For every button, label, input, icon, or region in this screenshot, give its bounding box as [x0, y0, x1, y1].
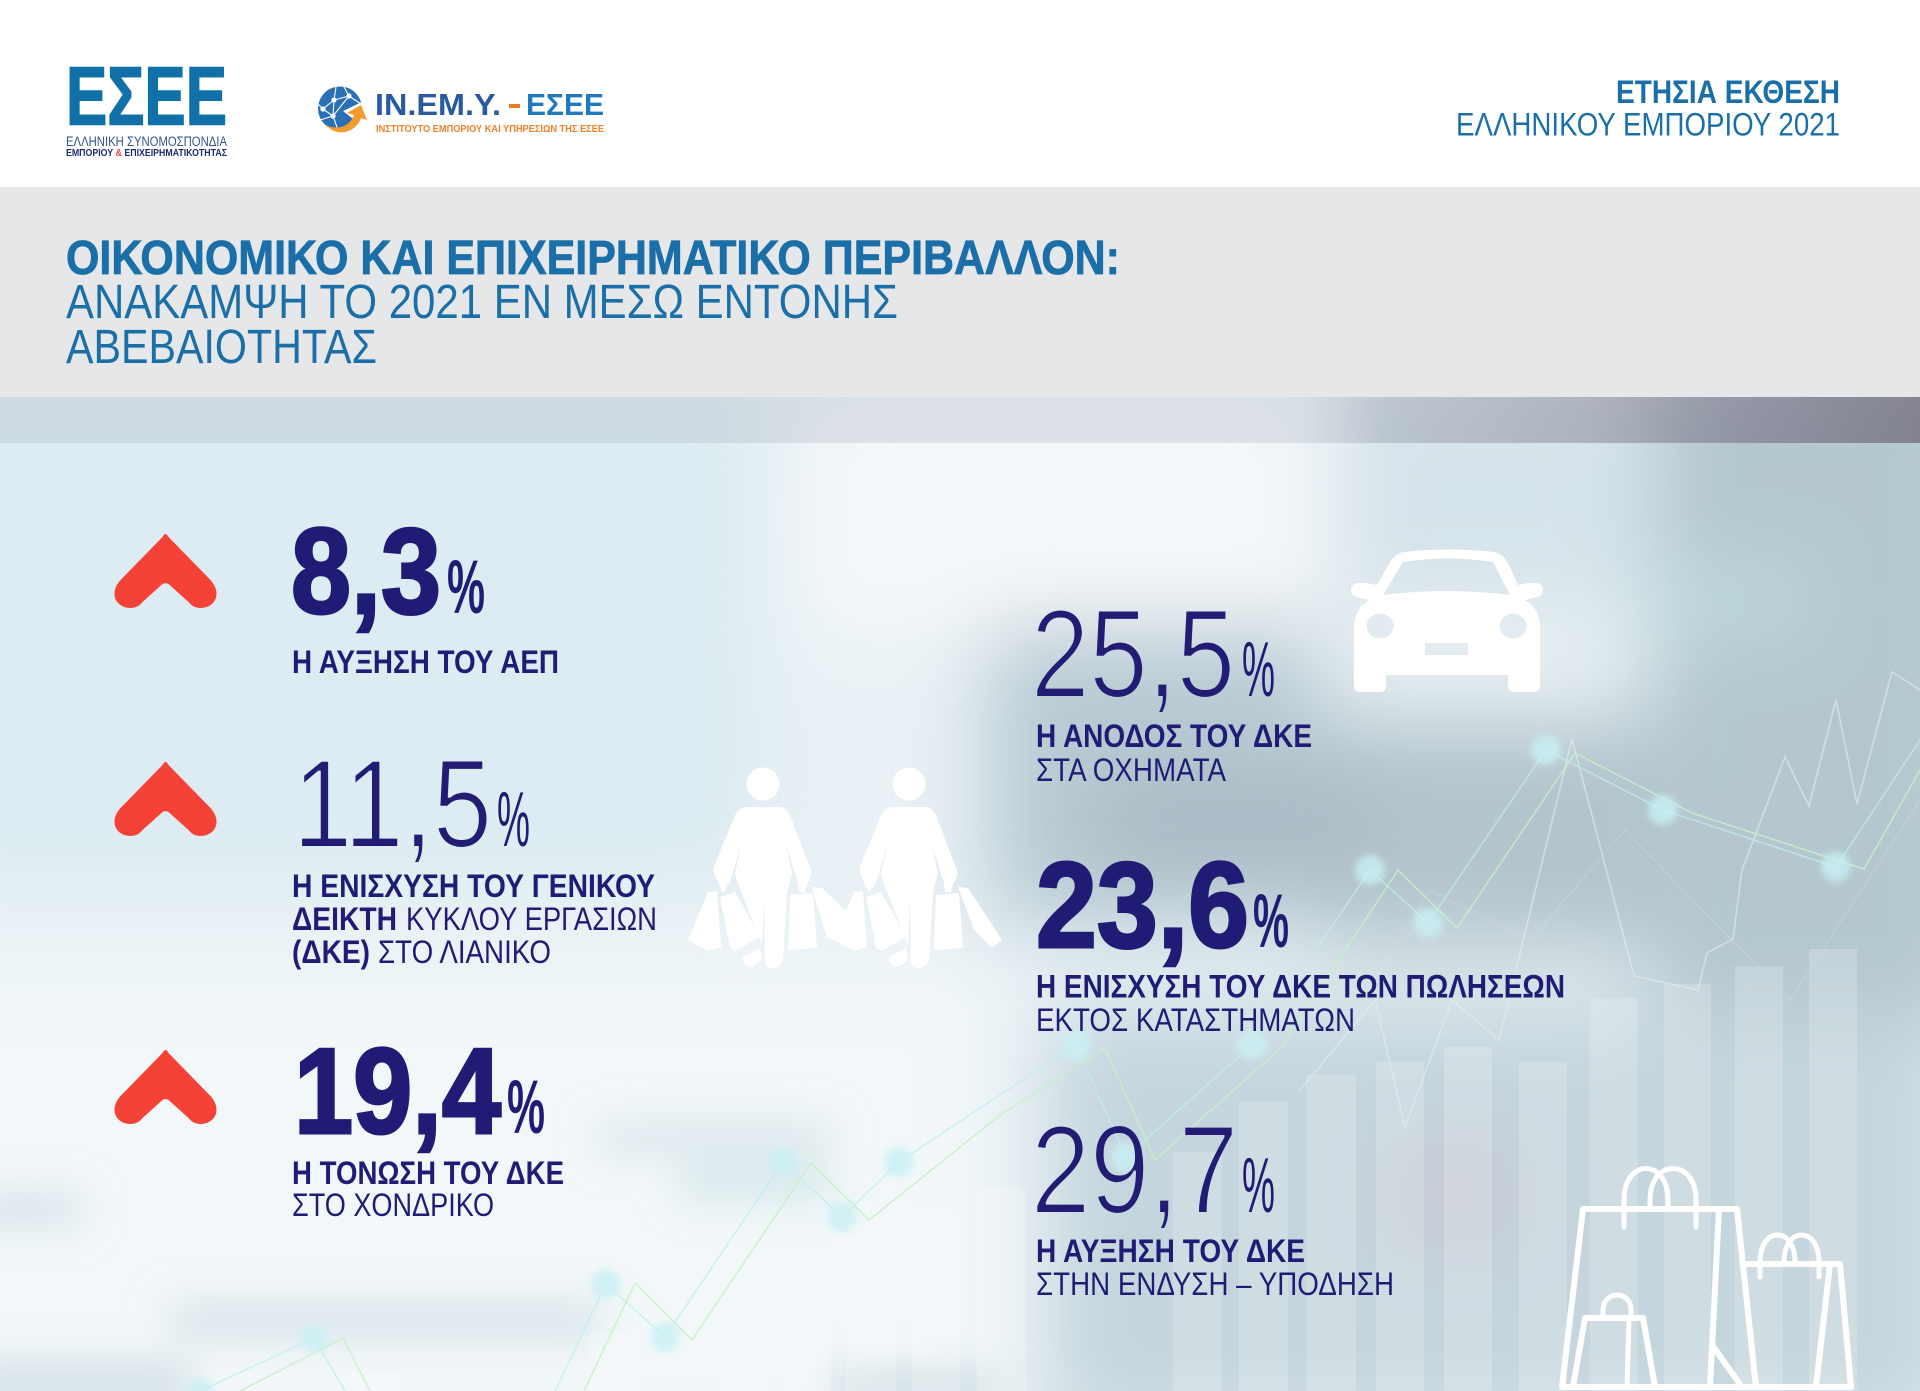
label: Η ΑΥΞΗΣΗ ΤΟΥ ΑΕΠ: [292, 644, 559, 680]
label: [292, 1155, 564, 1223]
percent sign: %: [447, 545, 485, 630]
strip under the header: [0, 397, 1920, 443]
percent sign: %: [507, 1065, 545, 1150]
label: [292, 868, 657, 970]
number: 19,4: [294, 1023, 501, 1159]
label: Η ΕΝΙΣΧΥΣΗ ΤΟΥ ΓΕΝΙΚΟΥ: [292, 868, 655, 904]
stat: 8,3% GDP: [114, 503, 559, 680]
logo: ΕΣΕΕ: ΕΜΠΟΡΙΟΥ & ΕΠΙΧΕΙΡΗΜΑΤΙΚΟΤΗΤΑΣ: [66, 147, 227, 159]
icon: car: [1351, 550, 1543, 692]
heading: ΑΝΑΚΑΜΨΗ ΤΟ 2021 ΕΝ ΜΕΣΩ ΕΝΤΟΝΗΣ: [66, 276, 898, 329]
stat: 11,5% retail: %: [497, 775, 530, 863]
icon: up arrow: [114, 534, 216, 608]
label: ΣΤΗΝ ΕΝΔΥΣΗ – ΥΠΟΔΗΣΗ: [1036, 1266, 1394, 1302]
number: 25,5: [1031, 585, 1235, 724]
logo: IN.EM.Y. - ΕΣΕΕ: [318, 86, 604, 135]
report title top right: [1456, 74, 1840, 142]
bar chart in background: [1173, 949, 1857, 1391]
logo: IN.EM.Y. - ΕΣΕΕ: ΕΣΕΕ: [526, 87, 604, 122]
stat: 11,5% retail: [114, 735, 657, 970]
large bag: [1562, 1168, 1756, 1387]
stat: 29,7% clothing and footwear: [1031, 1101, 1394, 1302]
label: ΕΚΤΟΣ ΚΑΤΑΣΤΗΜΑΤΩΝ: [1036, 1002, 1355, 1038]
stat: 29,7% clothing and footwear: %: [1242, 1141, 1275, 1229]
label: [1036, 968, 1565, 1038]
stat: 25,5% vehicles: %: [1242, 625, 1275, 713]
glowing chart nodes: [187, 735, 1851, 1391]
logo: ΕΣΕΕ: [66, 50, 227, 159]
label: Η ΕΝΙΣΧΥΣΗ ΤΟΥ ΔΚΕ ΤΩΝ ΠΩΛΗΣΕΩΝ: [1036, 968, 1565, 1004]
stat: 19,4% wholesale: [114, 1023, 564, 1223]
number: 8,3: [291, 503, 441, 639]
label: Η ΤΟΝΩΣΗ ΤΟΥ ΔΚΕ: [292, 1155, 564, 1191]
label: ΣΤΑ ΟΧΗΜΑΤΑ: [1036, 752, 1227, 788]
label: ΣΤΟ ΧΟΝΔΡΙΚΟ: [292, 1187, 494, 1223]
label: ΔΕΙΚΤΗ: [292, 901, 397, 937]
heading: ΑΒΕΒΑΙΟΤΗΤΑΣ: [66, 321, 377, 374]
label: ΚΥΚΛΟΥ ΕΡΓΑΣΙΩΝ: [406, 901, 657, 937]
heading: ΟΙΚΟΝΟΜΙΚΟ ΚΑΙ ΕΠΙΧΕΙΡΗΜΑΤΙΚΟ ΠΕΡΙΒΑΛΛΟΝ:: [66, 232, 1120, 285]
number: 11,5: [293, 735, 492, 874]
label: Η ΑΝΟΔΟΣ ΤΟΥ ΔΚΕ: [1036, 718, 1312, 754]
number: 29,7: [1031, 1101, 1238, 1240]
logo: ΕΣΕΕ: ΕΛΛΗΝΙΚΗ ΣΥΝΟΜΟΣΠΟΝΔΙΑ: [66, 134, 227, 149]
label: [1036, 718, 1312, 788]
shopper two: [834, 768, 1002, 968]
icon: shoppers with bags: [688, 768, 1002, 968]
stat: 25,5% vehicles: [1031, 585, 1312, 788]
label: Η ΑΥΞΗΣΗ ΤΟΥ ΔΚΕ: [1036, 1233, 1305, 1269]
blurred photo background: [0, 360, 1920, 1391]
logo: ΕΣΕΕ: ΕΣΕΕ: [66, 50, 227, 142]
icon: up arrow: [114, 762, 216, 836]
report title top right: ΕΛΛΗΝΙΚΟΥ ΕΜΠΟΡΙΟΥ 2021: [1456, 106, 1840, 142]
icon: shopping bags outline: [1562, 1168, 1851, 1387]
line chart in background: [200, 672, 1920, 1391]
small bag: [1573, 1295, 1655, 1387]
label: [1036, 1233, 1394, 1302]
logo: IN.EM.Y. - ΕΣΕΕ: ΙΝΣΤΙΤΟΥΤΟ ΕΜΠΟΡΙΟΥ ΚΑΙ ΥΠΗΡΕΣΙΩΝ ΤΗΣ ΕΣΕΕ: [376, 124, 604, 135]
number: 23,6: [1036, 837, 1249, 973]
icon: up arrow: [114, 1050, 216, 1124]
label: (ΔΚΕ): [292, 934, 370, 970]
shopper one: [688, 768, 850, 968]
logo: IN.EM.Y. - ΕΣΕΕ: IN.EM.Y.: [375, 87, 501, 122]
heading: [66, 232, 1120, 374]
heading band: [0, 187, 1920, 397]
report title top right: ΕΤΗΣΙΑ ΕΚΘΕΣΗ: [1616, 74, 1840, 110]
label: ΣΤΟ ΛΙΑΝΙΚΟ: [378, 934, 551, 970]
percent sign: %: [1253, 879, 1289, 964]
icon: globe with arrow: [318, 86, 367, 132]
medium bag: [1745, 1235, 1851, 1387]
stat: 23,6% non-store sales: [1036, 837, 1565, 1038]
